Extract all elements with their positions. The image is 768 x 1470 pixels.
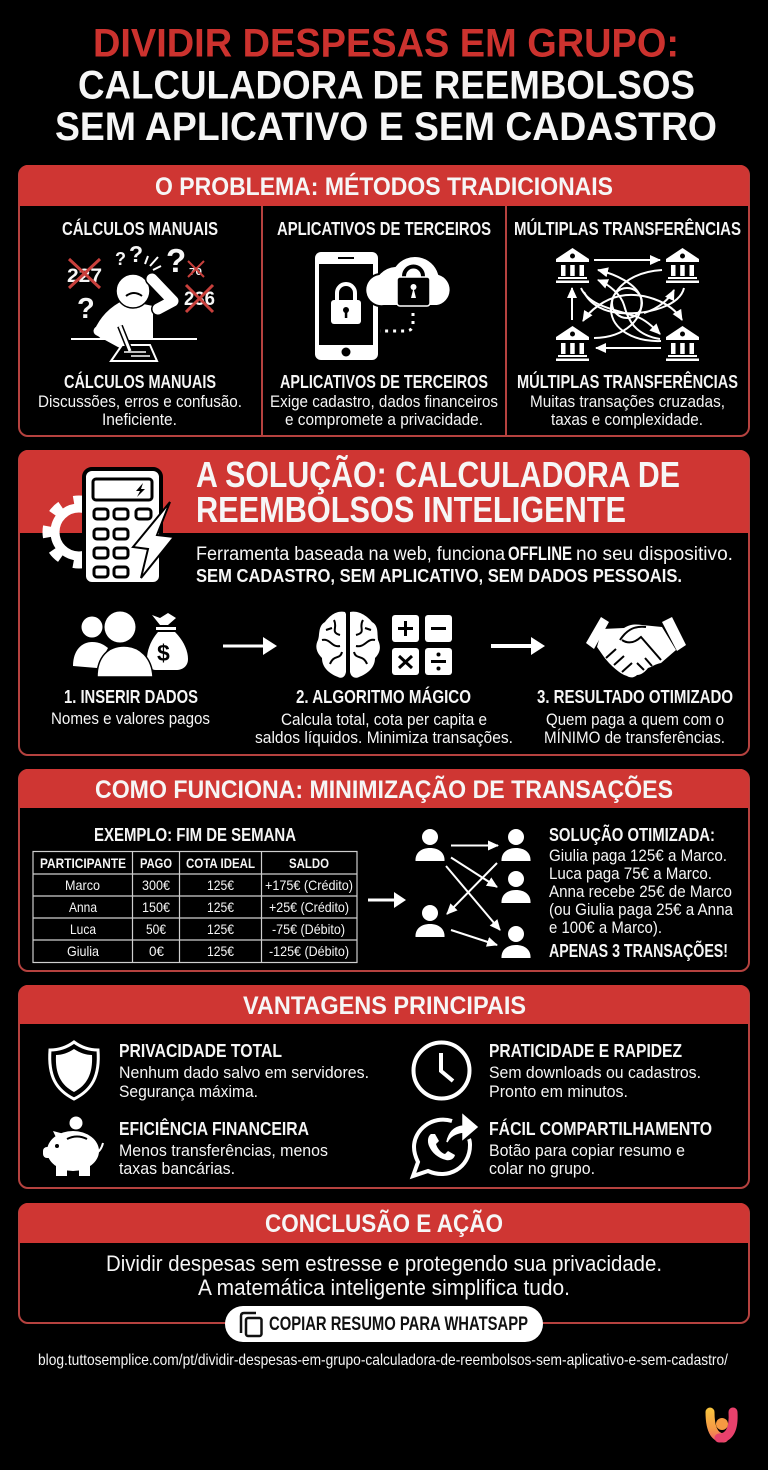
icon: people and money bag: $ xyxy=(157,640,170,666)
advantage: fácil compartilhamento: colar no grupo. xyxy=(489,1159,595,1178)
column: cálculos manuais: CÁLCULOS MANUAIS xyxy=(62,218,218,239)
panel: o problema xyxy=(19,165,749,436)
header: vantagens: VANTAGENS PRINCIPAIS xyxy=(243,992,526,1020)
table: example expenses: 150€ xyxy=(142,899,170,915)
column: múltiplas transferências: Muitas transações cruzadas, xyxy=(530,392,725,411)
description: no seu dispositivo. xyxy=(576,544,733,565)
icon: confused person doing calculations: ? xyxy=(115,249,126,269)
icon: calculator with gear and lightning bolt xyxy=(48,469,174,584)
column: aplicativos de terceiros: e compromete a privacidade. xyxy=(285,410,483,429)
step 3: resultado otimizado: Quem paga a quem com o xyxy=(546,710,724,729)
advantage: eficiência financeira: EFICIÊNCIA FINANCEIRA xyxy=(119,1118,309,1139)
header: o problema: O PROBLEMA: MÉTODOS TRADICIONAIS xyxy=(155,172,613,201)
panel: vantagens principais xyxy=(19,985,749,1188)
advantage: fácil compartilhamento: FÁCIL COMPARTILHAMENTO xyxy=(489,1118,712,1139)
table: example expenses: 0€ xyxy=(149,943,164,959)
column: aplicativos de terceiros xyxy=(270,218,498,429)
column: múltiplas transferências: taxas e complexidade. xyxy=(551,410,703,429)
description: Ferramenta baseada na web, funciona xyxy=(196,544,505,565)
icon: math operators xyxy=(392,615,452,675)
table: example expenses: +175€ (Crédito) xyxy=(265,877,353,893)
icon: brain xyxy=(316,612,380,678)
advantage: eficiência financeira xyxy=(43,1116,328,1178)
column: aplicativos de terceiros: APLICATIVOS DE TERCEIROS xyxy=(280,371,488,392)
table: example expenses: SALDO xyxy=(289,855,329,871)
description xyxy=(196,544,733,586)
icon: confused person doing calculations: ? xyxy=(77,293,95,325)
icon: whatsapp share xyxy=(413,1115,477,1176)
advantage: eficiência financeira: taxas bancárias. xyxy=(119,1159,235,1178)
arrow: table to diagram xyxy=(368,892,406,908)
advantage: fácil compartilhamento: Botão para copiar resumo e xyxy=(489,1141,685,1160)
table: example expenses: -75€ (Débito) xyxy=(272,921,345,937)
step 1: inserir dados: 1. INSERIR DADOS xyxy=(64,686,198,707)
table: example expenses: +25€ (Crédito) xyxy=(269,899,349,915)
table: example expenses: PARTICIPANTE xyxy=(40,855,126,871)
arrow: step 1 to 2 xyxy=(223,637,277,655)
icon: banks with crossing transfer arrows xyxy=(556,248,699,361)
header: como funciona xyxy=(19,769,749,808)
table: example expenses: COTA IDEAL xyxy=(186,855,255,871)
panel: a solução xyxy=(19,450,749,755)
icon: confused person doing calculations xyxy=(67,241,215,361)
header: a solução xyxy=(19,450,749,533)
step 1: inserir dados xyxy=(51,612,210,728)
title: SEM APLICATIVO E SEM CADASTRO xyxy=(55,105,717,149)
button: copiar resumo xyxy=(225,1306,543,1342)
advantage: praticidade e rapidez: Sem downloads ou cadastros. xyxy=(489,1063,701,1082)
logo xyxy=(710,1412,733,1438)
table: example expenses: 125€ xyxy=(207,877,234,893)
advantage: privacidade total: Segurança máxima. xyxy=(119,1082,258,1101)
header: vantagens xyxy=(19,985,749,1024)
advantage: praticidade e rapidez: PRATICIDADE E RAPIDEZ xyxy=(489,1040,682,1061)
text: solução otimizada: Anna recebe 25€ de Marco xyxy=(549,882,732,901)
icon: copy xyxy=(241,1313,262,1336)
table: example expenses: PAGO xyxy=(140,855,172,871)
advantage: privacidade total xyxy=(50,1040,369,1101)
diagram: optimized transfers between people xyxy=(415,829,531,958)
table: example expenses: -125€ (Débito) xyxy=(269,943,349,959)
header: conclusão: CONCLUSÃO E AÇÃO xyxy=(265,1208,503,1238)
icon: shield xyxy=(50,1042,98,1099)
advantage: praticidade e rapidez xyxy=(414,1040,701,1101)
table: example expenses: Marco xyxy=(65,877,100,893)
panel: conclusão e ação xyxy=(19,1203,749,1342)
table: example expenses: 125€ xyxy=(207,899,234,915)
step 2: algoritmo mágico: Calcula total, cota per capita e xyxy=(281,710,487,729)
step 2: algoritmo mágico: 2. ALGORITMO MÁGICO xyxy=(296,686,471,707)
title: DIVIDIR DESPESAS EM GRUPO: xyxy=(93,22,679,66)
step 3: resultado otimizado: MÍNIMO de transferências. xyxy=(544,728,725,747)
icon: clock xyxy=(414,1042,470,1098)
conclusion text xyxy=(106,1251,662,1300)
title: CALCULADORA DE REEMBOLSOS xyxy=(78,64,695,108)
step 3: resultado otimizado xyxy=(537,617,733,747)
text: solução otimizada: Luca paga 75€ a Marco. xyxy=(549,864,712,883)
icon: confused person doing calculations: ? xyxy=(166,242,186,279)
icon: piggy bank xyxy=(43,1116,103,1176)
column: cálculos manuais: Ineficiente. xyxy=(102,410,177,429)
column: cálculos manuais: CÁLCULOS MANUAIS xyxy=(64,371,216,392)
text: solução otimizada xyxy=(549,824,733,961)
table: example expenses: Giulia xyxy=(67,943,99,959)
icon: confused person doing calculations: ? xyxy=(129,241,143,267)
header: a solução: REEMBOLSOS INTELIGENTE xyxy=(196,489,626,530)
step 2: algoritmo mágico xyxy=(255,612,513,747)
step 2: algoritmo mágico: saldos líquidos. Minimiza transações. xyxy=(255,728,513,747)
icon: confused person doing calculations: 227 xyxy=(67,266,102,287)
advantage: fácil compartilhamento xyxy=(413,1115,712,1178)
header: o problema xyxy=(19,165,749,206)
header: como funciona: COMO FUNCIONA: MINIMIZAÇÃO DE TRANSAÇÕES xyxy=(95,774,673,804)
table: example expenses: 300€ xyxy=(142,877,170,893)
step 1: inserir dados: Nomes e valores pagos xyxy=(51,709,210,728)
text: solução otimizada: SOLUÇÃO OTIMIZADA: xyxy=(549,824,715,845)
header: a solução: A SOLUÇÃO: CALCULADORA DE xyxy=(196,453,680,495)
icon: handshake xyxy=(586,617,686,677)
advantage: praticidade e rapidez: Pronto em minutos. xyxy=(489,1082,628,1101)
header: conclusão xyxy=(19,1203,749,1243)
icon: people and money bag xyxy=(73,612,188,677)
conclusion text: A matemática inteligente simplifica tudo. xyxy=(198,1275,570,1300)
table: example expenses: 125€ xyxy=(207,921,234,937)
column: aplicativos de terceiros: Exige cadastro, dados financeiros xyxy=(270,392,498,411)
column: cálculos manuais xyxy=(38,218,242,429)
icon: confused person doing calculations: 236 xyxy=(184,289,215,310)
text: solução otimizada: e 100€ a Marco). xyxy=(549,918,662,937)
text: solução otimizada: Giulia paga 125€ a Marco. xyxy=(549,846,727,865)
advantage: privacidade total: PRIVACIDADE TOTAL xyxy=(119,1040,282,1061)
description: SEM CADASTRO, SEM APLICATIVO, SEM DADOS PESSOAIS. xyxy=(196,565,682,586)
heading: exemplo: EXEMPLO: FIM DE SEMANA xyxy=(94,824,296,845)
table: example expenses: 125€ xyxy=(207,943,234,959)
table: example expenses: 50€ xyxy=(146,921,166,937)
button: copiar resumo: COPIAR RESUMO PARA WHATSAPP xyxy=(269,1314,528,1335)
advantage: eficiência financeira: Menos transferências, menos xyxy=(119,1141,328,1160)
table: example expenses: Anna xyxy=(69,899,97,915)
text: solução otimizada: (ou Giulia paga 25€ a Anna xyxy=(549,900,733,919)
column: múltiplas transferências xyxy=(514,218,741,429)
table: example expenses xyxy=(33,852,357,962)
arrow: step 2 to 3 xyxy=(491,637,545,655)
panel: como funciona xyxy=(19,769,749,971)
icon: confused person doing calculations: 70 xyxy=(189,267,203,278)
column: cálculos manuais: Discussões, erros e confusão. xyxy=(38,392,242,411)
advantage: privacidade total: Nenhum dado salvo em servidores. xyxy=(119,1063,369,1082)
title xyxy=(55,22,717,149)
table: example expenses: Luca xyxy=(70,921,96,937)
conclusion text: Dividir despesas sem estresse e protegendo sua privacidade. xyxy=(106,1251,662,1276)
icon: phone and cloud with padlocks xyxy=(315,252,451,360)
column: aplicativos de terceiros: APLICATIVOS DE TERCEIROS xyxy=(277,218,491,239)
description: OFFLINE xyxy=(508,544,572,565)
